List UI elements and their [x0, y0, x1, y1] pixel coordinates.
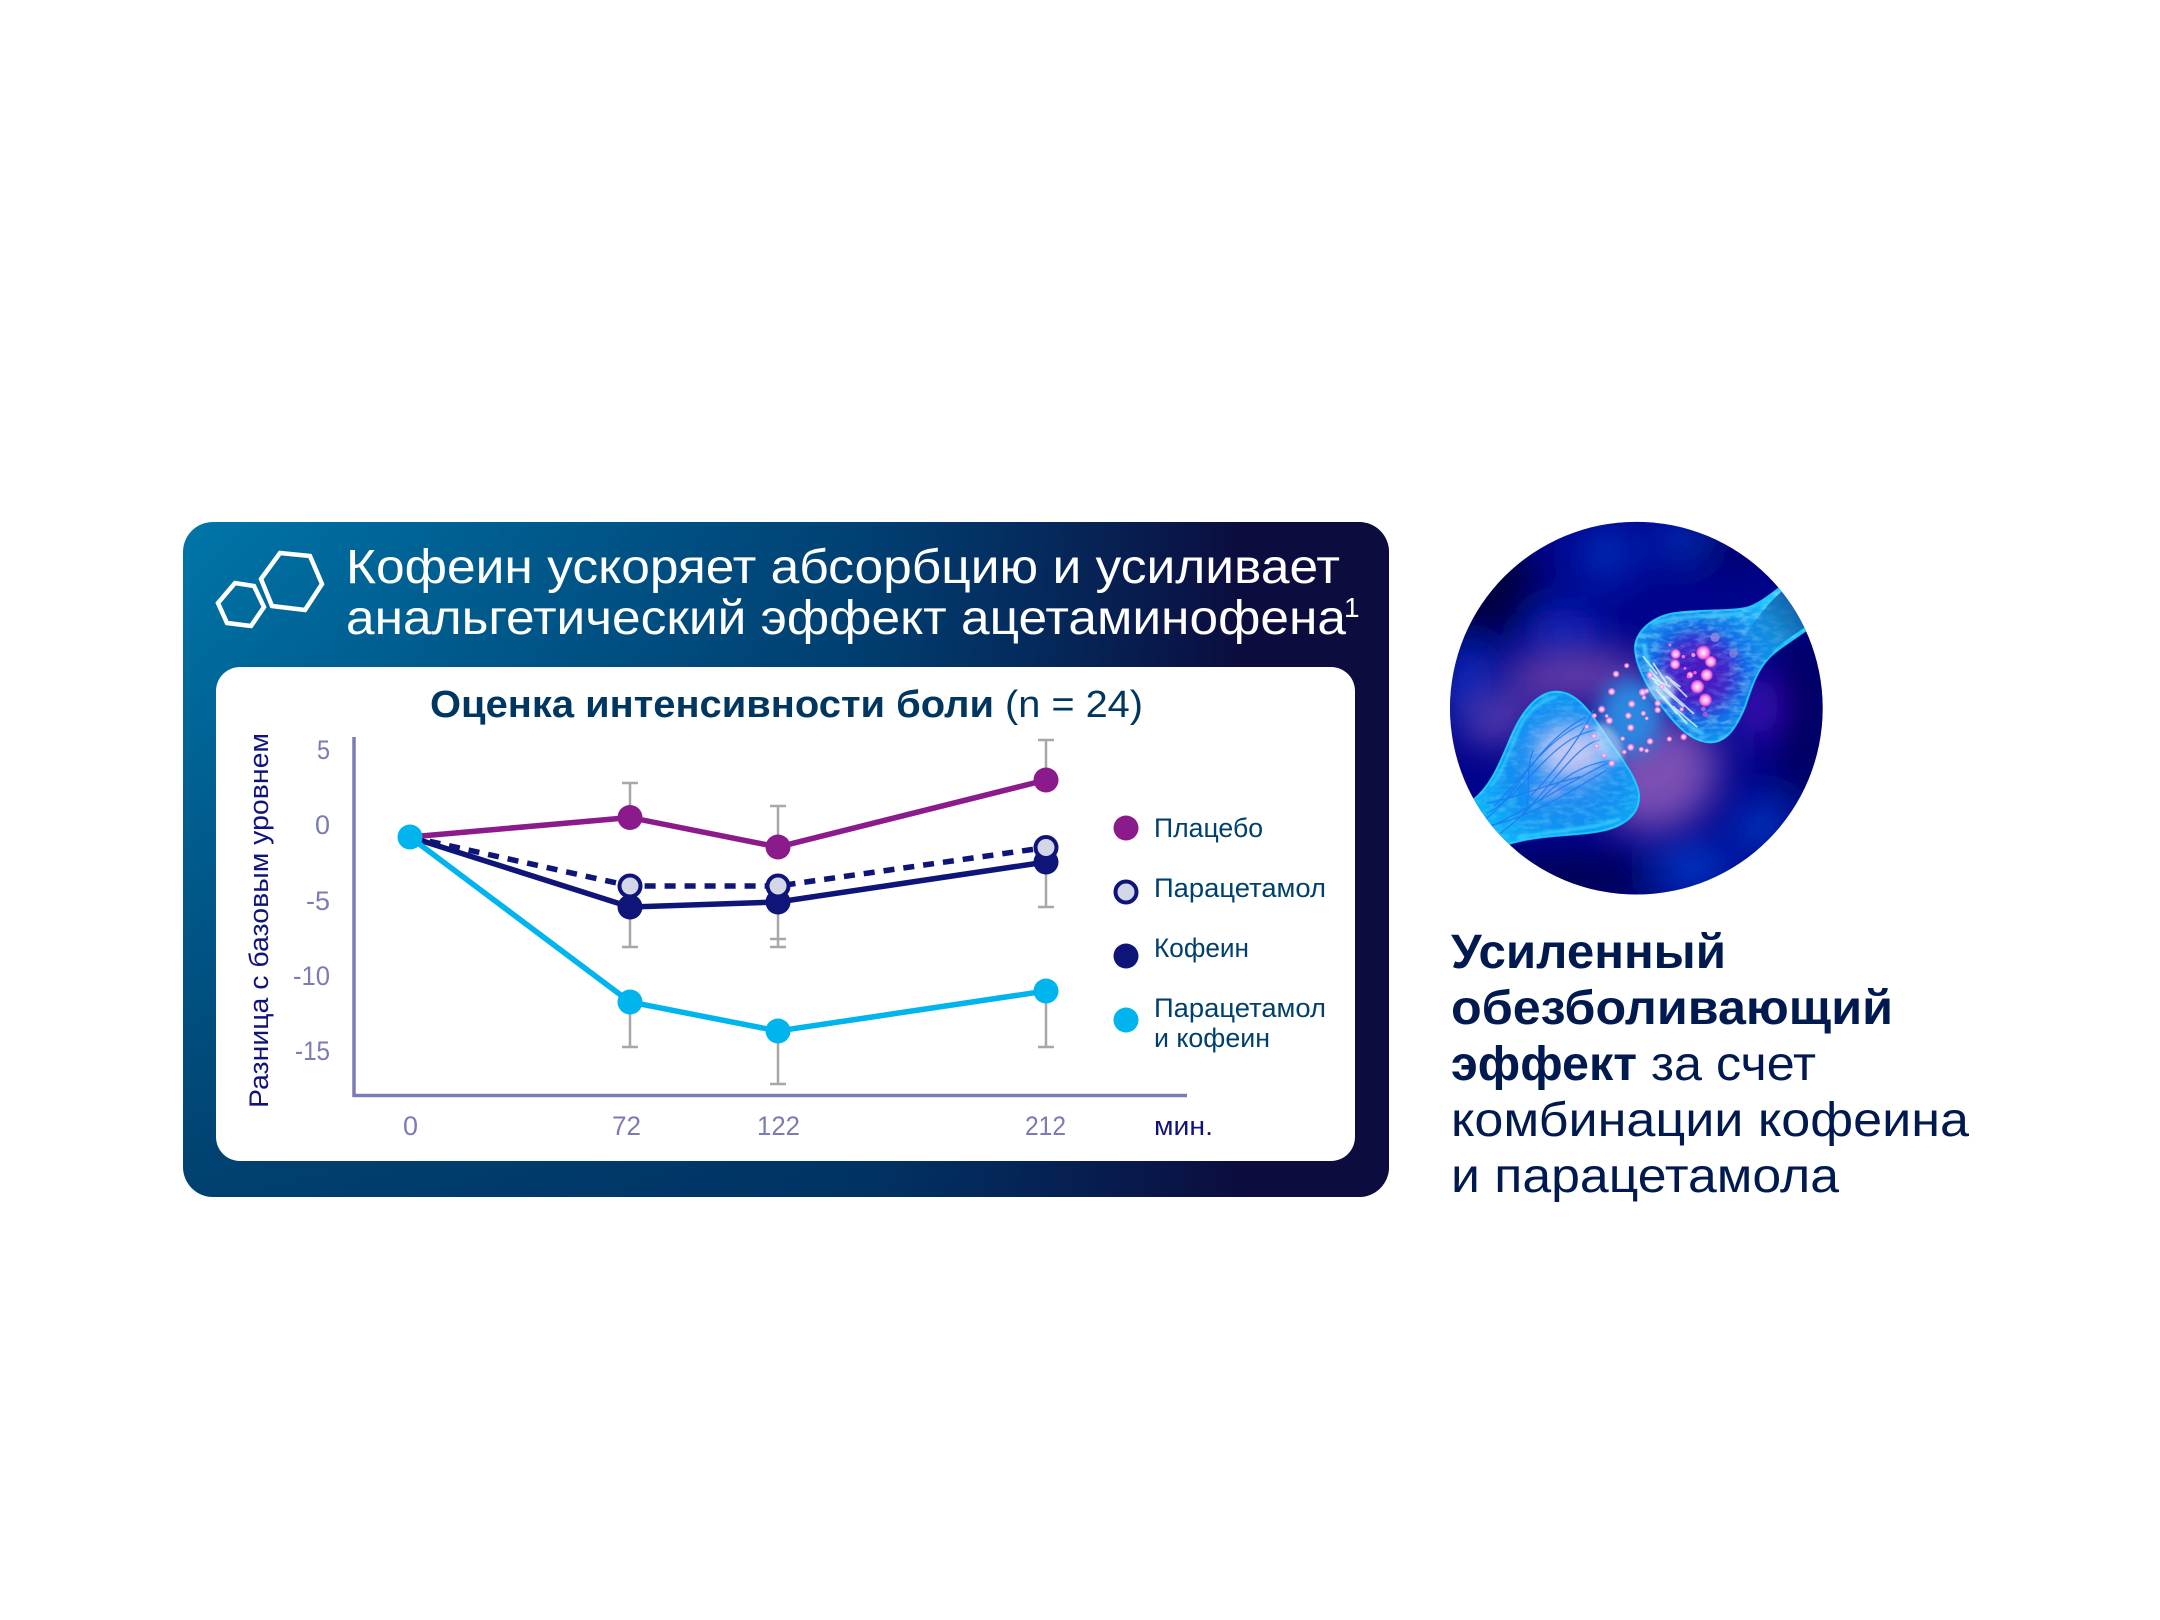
upper neuron bulb: [1634, 588, 1806, 744]
x axis tick labels: мин.: [1154, 1111, 1213, 1141]
y axis tick labels: 5: [317, 735, 330, 765]
series: placebo: [410, 768, 1058, 860]
text block: enhanced analgesic effect: и парацетамола: [1451, 1150, 1839, 1203]
heading: panel title: [346, 541, 1360, 645]
text block: enhanced analgesic effect: Усиленный: [1451, 926, 1726, 979]
x axis tick labels: 212: [1025, 1111, 1066, 1141]
y axis label: Разница с базовым уровнем: [244, 733, 274, 1108]
illustration: synapse circle: [1450, 522, 1823, 894]
y axis tick labels: -5: [306, 886, 330, 916]
neurotransmitter particles: [1584, 663, 1687, 767]
y axis tick labels: [293, 735, 330, 1066]
vesicles inside upper bulb: [1669, 633, 1738, 717]
heading: panel title: 1: [1344, 592, 1360, 623]
panel: caffeine effect card: [183, 522, 1389, 1197]
y axis tick labels: -15: [295, 1036, 330, 1066]
heading: panel title: Кофеин ускоряет абсорбцию и усиливает: [346, 541, 1340, 594]
legend: и кофеин: [1154, 1023, 1270, 1053]
panel: white chart area: [216, 667, 1355, 1161]
x axis tick labels: [403, 1111, 1213, 1141]
text block: enhanced analgesic effect: комбинации кофеина: [1451, 1094, 1969, 1147]
series: caffeine: [410, 837, 1058, 920]
legend: Кофеин: [1154, 933, 1249, 963]
heading: panel title: анальгетический эффект ацетаминофена: [346, 592, 1346, 645]
text block: enhanced analgesic effect: [1451, 926, 1969, 1203]
text block: enhanced analgesic effect: обезболивающий: [1451, 982, 1893, 1035]
error bars: [622, 740, 1054, 1084]
legend: Плацебо: [1154, 813, 1263, 843]
x axis tick labels: 0: [403, 1111, 418, 1141]
legend: Парацетамол: [1154, 993, 1326, 1023]
text block: enhanced analgesic effect: за счет: [1651, 1038, 1816, 1091]
x axis tick labels: 122: [757, 1111, 800, 1141]
heading: chart title: (n = 24): [1005, 684, 1143, 726]
legend: [1114, 813, 1326, 1053]
icon: hexagons: [218, 553, 322, 626]
series: paracetamol: [410, 837, 1056, 896]
line chart: [244, 733, 1326, 1141]
text block: enhanced analgesic effect: эффект: [1451, 1038, 1637, 1091]
x axis tick labels: 72: [612, 1111, 641, 1141]
heading: chart title: Оценка интенсивности боли: [430, 684, 994, 726]
y axis tick labels: -10: [293, 961, 330, 991]
lower neuron bulb: [1474, 690, 1640, 845]
y axis tick labels: 0: [315, 810, 330, 840]
legend: Парацетамол: [1154, 873, 1326, 903]
series: paracetamol and caffeine: [398, 824, 1058, 1044]
axes: [354, 737, 1187, 1096]
